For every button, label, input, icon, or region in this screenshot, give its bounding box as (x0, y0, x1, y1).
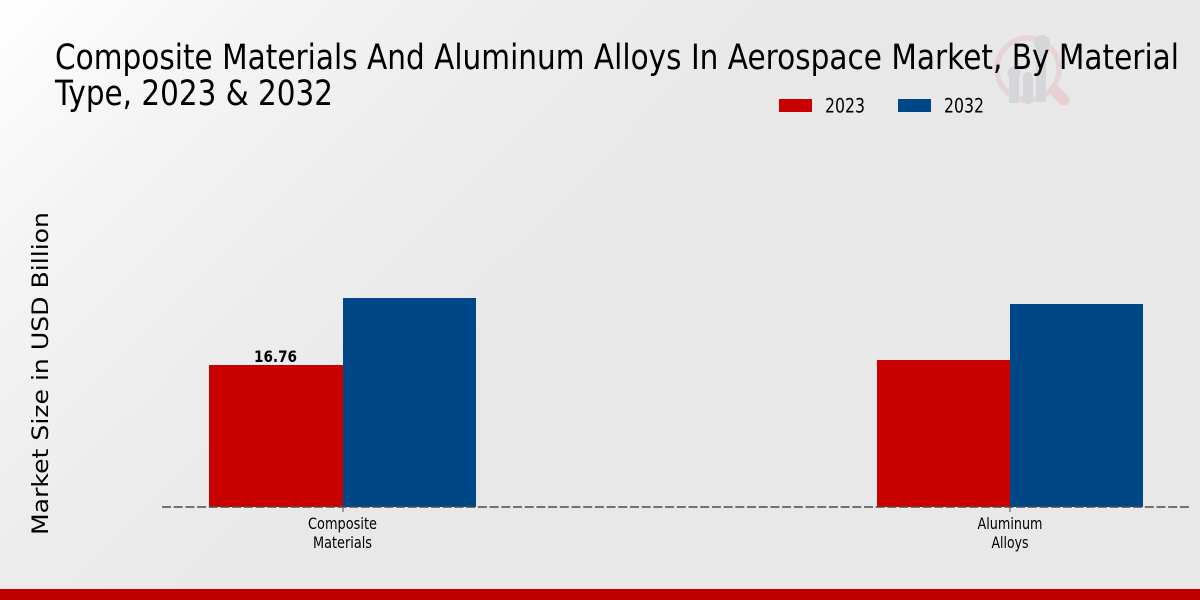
bar: Aluminum Alloys 2032 (1010, 304, 1143, 507)
legend (779, 94, 984, 118)
legend item: 2032 (898, 94, 984, 118)
tick: Aluminum Alloys (1009, 507, 1011, 512)
category label: Aluminum Alloys: Aluminum (978, 514, 1042, 533)
category label: Aluminum Alloys (978, 514, 1042, 552)
bar chart (162, 298, 1190, 552)
footer bar (0, 589, 1200, 600)
icon: watermark logo (997, 35, 1064, 104)
value label: 16.76: 16.76 (254, 347, 297, 366)
legend item: 2023: 2023 (825, 94, 865, 118)
bar: Composite Materials 2032 (343, 298, 476, 507)
tick: Composite Materials (342, 507, 344, 512)
y-axis label: Market Size in USD Billion (28, 212, 54, 535)
category label: Composite Materials (308, 514, 377, 552)
title (54, 38, 1179, 114)
bar: Aluminum Alloys 2023 (877, 360, 1010, 507)
legend item: 2032: 2032 (944, 94, 984, 118)
category label: Composite Materials: Composite (308, 514, 377, 533)
title: Type, 2023 & 2032 (54, 74, 333, 114)
legend item: 2023 (779, 94, 865, 118)
bar: Composite Materials 2023 (209, 365, 343, 507)
category label: Composite Materials: Materials (313, 533, 372, 552)
baseline (162, 506, 1190, 508)
category label: Aluminum Alloys: Alloys (992, 533, 1028, 552)
